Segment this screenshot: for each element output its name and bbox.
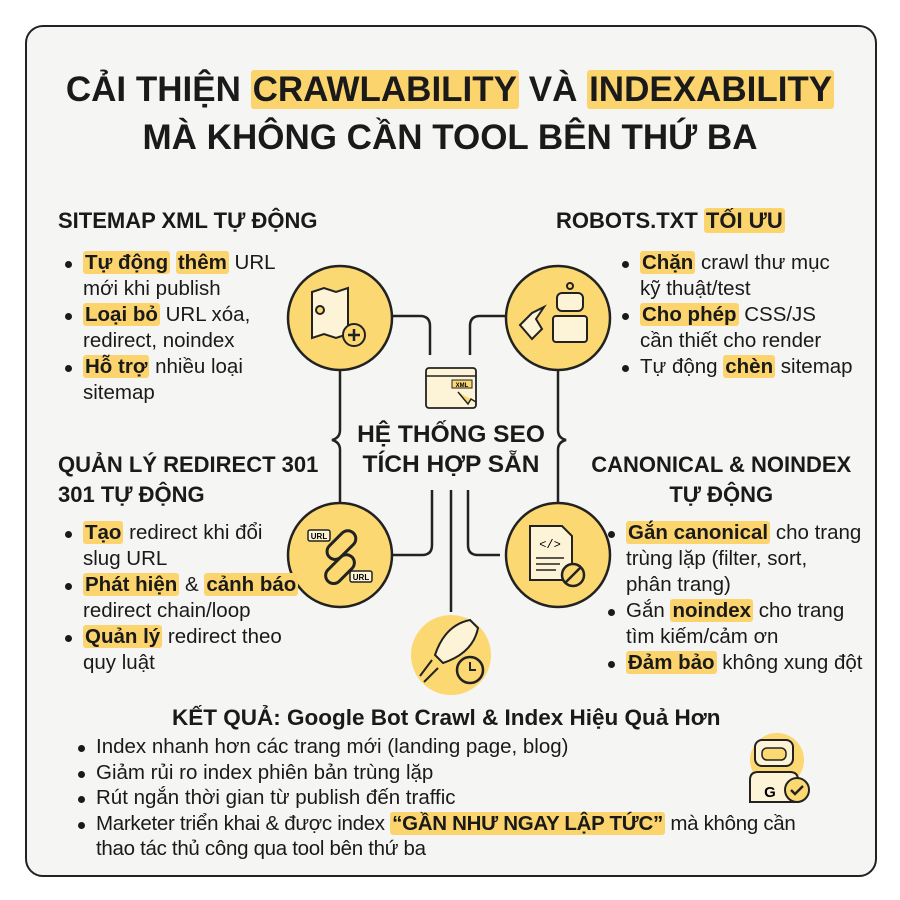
panel: redirect: Phát hiện & cảnh báo (85, 573, 296, 596)
panel: sitemap: Hỗ trợ nhiều loại (85, 355, 243, 378)
panel: canonical: tìm kiếm/cảm ơn (626, 625, 778, 648)
panel: redirect: redirect chain/loop (83, 599, 251, 622)
panel: results (78, 705, 796, 860)
title: MÀ KHÔNG CẦN TOOL BÊN THỨ BA (143, 118, 757, 157)
panel: results: Marketer triển khai & được index “GẦN NHƯ NGAY LẬP TỨC” mà không cần (96, 812, 796, 834)
panel: results: Giảm rủi ro index phiên bản trùng lặp (96, 760, 433, 784)
center label: TÍCH HỢP SẴN (362, 451, 540, 478)
icon: chain: URL (353, 573, 369, 582)
panel: redirect: Quản lý redirect theo (85, 625, 282, 648)
panel: redirect: 301 TỰ ĐỘNG (58, 482, 205, 507)
panel: results: Rút ngắn thời gian từ publish đến traffic (96, 786, 456, 809)
icon: chain: URL (311, 532, 327, 541)
icon: robot google (750, 733, 809, 802)
icon: rocket (411, 615, 491, 695)
panel: robots: Cho phép CSS/JS (642, 303, 816, 326)
panel: redirect: slug URL (83, 547, 167, 570)
panel: sitemap: redirect, noindex (83, 329, 235, 352)
panel: robots: kỹ thuật/test (640, 277, 751, 300)
panel: redirect (58, 452, 318, 674)
panel: sitemap: SITEMAP XML TỰ ĐỘNG (58, 208, 317, 233)
panel: results: thao tác thủ công qua tool bên thứ ba (96, 837, 426, 860)
panel: canonical: TỰ ĐỘNG (669, 482, 773, 507)
panel: results: Index nhanh hơn các trang mới (landing page, blog) (96, 735, 568, 758)
panel: robots: Tự động chèn sitemap (640, 355, 853, 378)
center label: HỆ THỐNG SEO (357, 421, 545, 448)
icon: robot google: G (764, 784, 776, 801)
panel: canonical: Gắn noindex cho trang (626, 599, 844, 622)
panel: sitemap: Tự động thêm URL (85, 251, 276, 274)
panel: redirect: quy luật (83, 651, 155, 674)
panel: sitemap: mới khi publish (83, 277, 221, 300)
title: CẢI THIỆN CRAWLABILITY VÀ INDEXABILITY (66, 70, 832, 109)
panel: robots (556, 208, 853, 378)
panel: robots: Chặn crawl thư mục (642, 251, 830, 274)
icon: code doc: </> (539, 538, 561, 552)
panel: canonical (591, 452, 862, 674)
panel: redirect: Tạo redirect khi đổi (85, 521, 262, 544)
title (66, 69, 834, 157)
icon: chain (288, 503, 392, 607)
panel: sitemap (58, 208, 317, 404)
panel: redirect: QUẢN LÝ REDIRECT 301 (58, 452, 318, 477)
icon: center xml window: XML (456, 383, 469, 389)
icon: sitemap map (288, 266, 392, 370)
panel: results: KẾT QUẢ: Google Bot Crawl & Index Hiệu Quả Hơn (172, 705, 721, 730)
panel: sitemap: Loại bỏ URL xóa, (85, 303, 250, 326)
icon: code doc (506, 503, 610, 607)
icon: robot hand (506, 266, 610, 370)
panel: sitemap: sitemap (83, 381, 155, 404)
panel: canonical: phân trang) (626, 573, 731, 596)
panel: canonical: Gắn canonical cho trang (628, 521, 861, 544)
panel: robots: ROBOTS.TXT TỐI ƯU (556, 208, 783, 233)
panel: canonical: trùng lặp (filter, sort, (626, 547, 807, 570)
icon: center xml window (426, 368, 476, 408)
center label (357, 420, 545, 478)
panel: robots: cần thiết cho render (640, 329, 821, 352)
panel: canonical: CANONICAL & NOINDEX (591, 452, 851, 477)
panel: canonical: Đảm bảo không xung đột (628, 651, 862, 674)
